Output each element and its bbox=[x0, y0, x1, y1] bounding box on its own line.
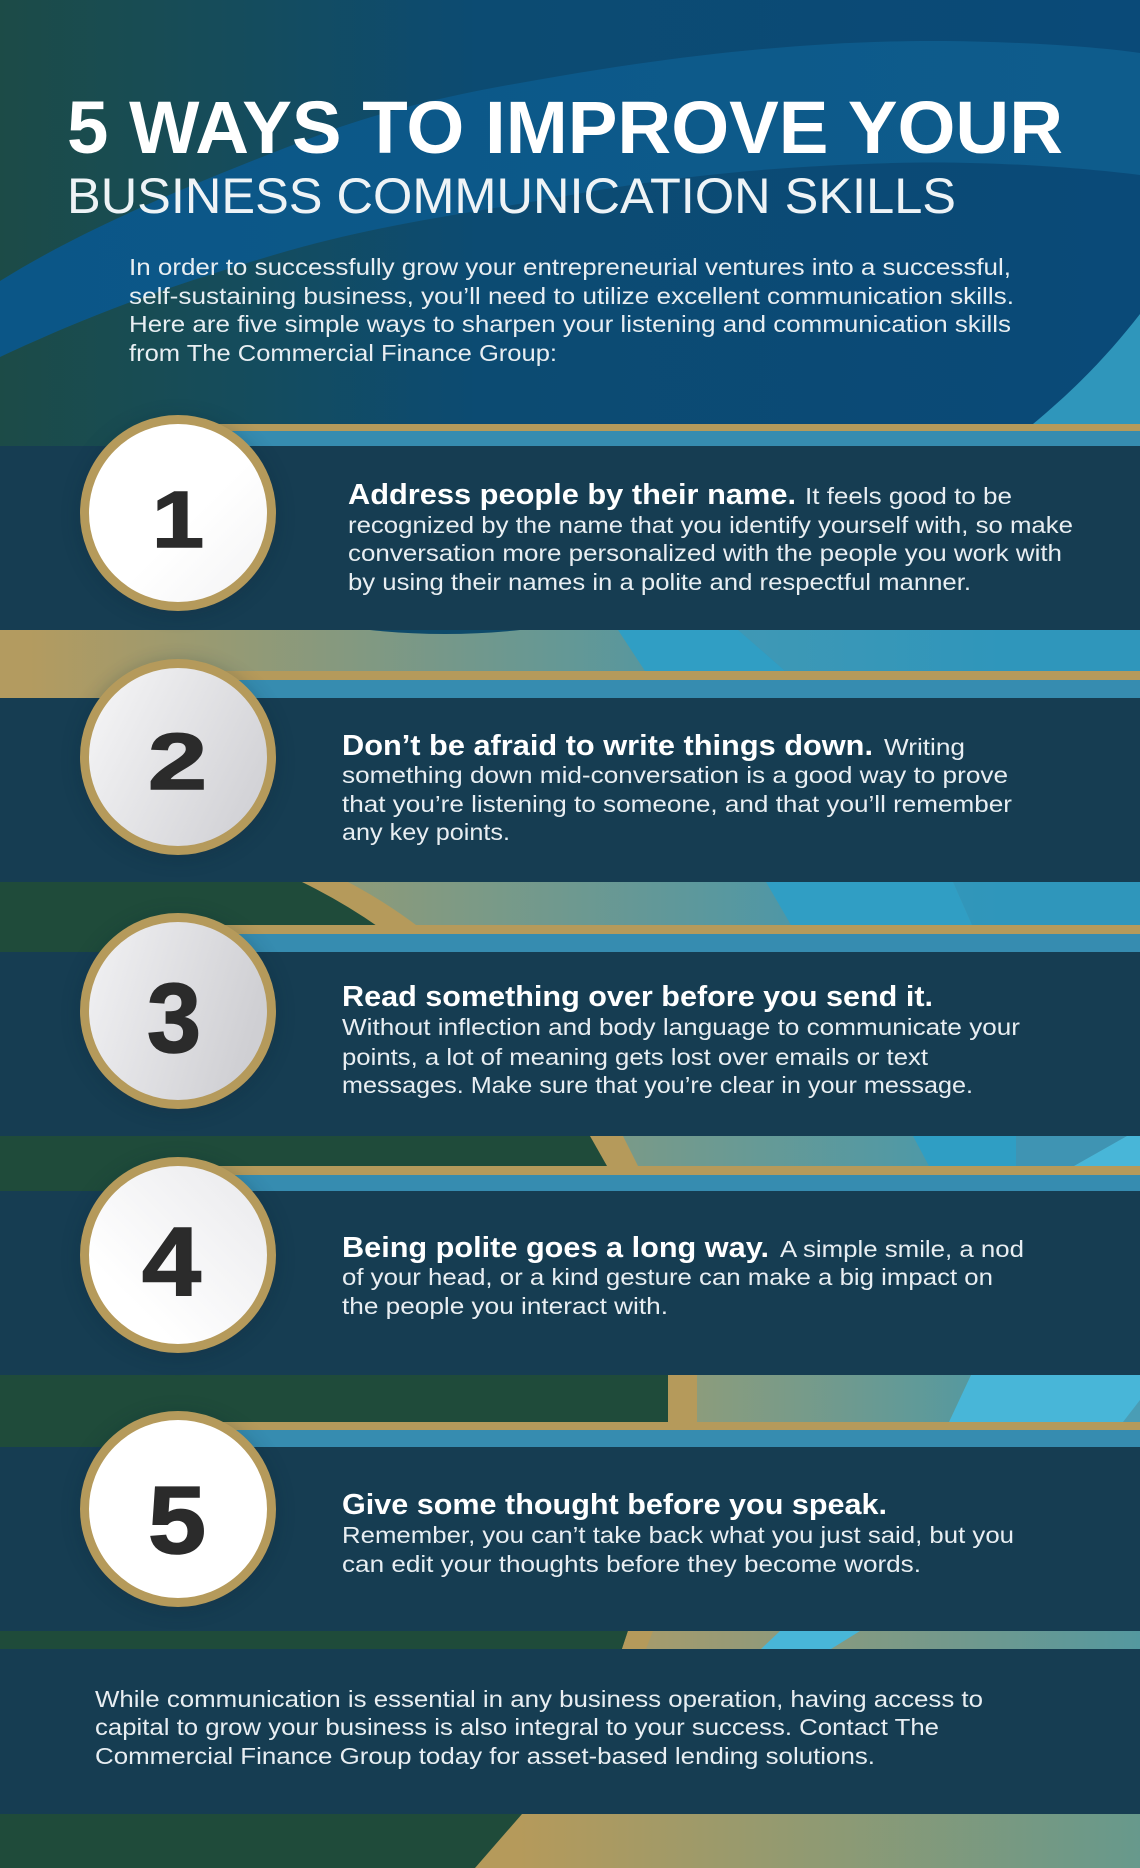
panel 5 text: Remember, you can’t take back what you just said, but you bbox=[342, 1522, 1014, 1548]
panel 3 text bbox=[342, 981, 1020, 1098]
panel 5: think before speaking bbox=[0, 1412, 1140, 1631]
closing paragraph: capital to grow your business is also integral to your success. Contact The bbox=[95, 1714, 939, 1740]
number badge 5 bbox=[84, 1416, 272, 1602]
number badge 3 bbox=[84, 918, 272, 1104]
number badge 4: 4 bbox=[142, 1207, 201, 1316]
panel 1 text: Address people by their name. bbox=[348, 479, 796, 511]
panel 2 text: Writing bbox=[884, 734, 965, 760]
intro paragraph: from The Commercial Finance Group: bbox=[129, 340, 557, 366]
panel 2 text bbox=[342, 730, 1012, 845]
panel 2 text: something down mid-conversation is a good way to prove bbox=[342, 762, 1008, 788]
closing paragraph: While communication is essential in any business operation, having access to bbox=[95, 1686, 983, 1712]
panel 4 text: A simple smile, a nod bbox=[780, 1236, 1024, 1262]
decorative band between panel 5 and closing panel bbox=[0, 1631, 1140, 1649]
number badge 5: 5 bbox=[148, 1467, 206, 1574]
panel 1 text: by using their names in a polite and respectful manner. bbox=[348, 569, 971, 595]
panel 5 text: Give some thought before you speak. bbox=[342, 1489, 887, 1521]
panel 3 text: Without inflection and body language to communicate your bbox=[342, 1014, 1020, 1040]
intro paragraph: In order to successfully grow your entrepreneurial ventures into a successful, bbox=[129, 254, 1011, 280]
panel 4 text bbox=[342, 1232, 1024, 1319]
panel 3 text: Read something over before you send it. bbox=[342, 981, 933, 1013]
panel 3: read before sending bbox=[0, 914, 1140, 1136]
panel 5 text bbox=[342, 1489, 1014, 1577]
decorative band between panels 4 and 5 bbox=[0, 1375, 1140, 1447]
panel 1 text: It feels good to be bbox=[805, 483, 1012, 509]
intro paragraph: Here are five simple ways to sharpen your listening and communication skills bbox=[129, 311, 1011, 337]
header title: 5 WAYS TO IMPROVE YOUR bbox=[67, 86, 1063, 169]
panel 4 text: the people you interact with. bbox=[342, 1293, 668, 1319]
panel 2: write things down bbox=[0, 660, 1140, 882]
number badge 2: 2 bbox=[148, 717, 207, 806]
header subtitle: BUSINESS COMMUNICATION SKILLS bbox=[67, 168, 956, 224]
panel 4 text: of your head, or a kind gesture can make a big impact on bbox=[342, 1264, 993, 1290]
panel 4: being polite bbox=[0, 1158, 1140, 1375]
number badge 3: 3 bbox=[147, 963, 201, 1073]
panel 1 text bbox=[348, 479, 1073, 595]
panel 4 text: Being polite goes a long way. bbox=[342, 1232, 769, 1264]
intro paragraph: self-sustaining business, you’ll need to utilize excellent communication skills. bbox=[129, 283, 1014, 309]
panel 3 text: messages. Make sure that you’re clear in your message. bbox=[342, 1072, 973, 1098]
decorative band between panels 2 and 3 bbox=[0, 882, 1140, 952]
number badge 2 bbox=[84, 664, 272, 850]
decorative band between panels 3 and 4 bbox=[0, 1136, 1140, 1191]
intro paragraph bbox=[129, 254, 1014, 366]
decorative band between panels 1 and 2 bbox=[0, 630, 1140, 698]
panel 2 text: Don’t be afraid to write things down. bbox=[342, 730, 873, 762]
closing paragraph: Commercial Finance Group today for asset-based lending solutions. bbox=[95, 1743, 875, 1769]
number badge 1: 1 bbox=[152, 475, 204, 564]
closing paragraph bbox=[95, 1686, 983, 1769]
panel 1 text: conversation more personalized with the people you work with bbox=[348, 540, 1062, 566]
panel 1: address people by name bbox=[0, 416, 1140, 630]
decorative footer band bbox=[0, 1814, 1140, 1868]
panel 2 text: any key points. bbox=[342, 819, 510, 845]
header background with waves bbox=[0, 0, 1140, 450]
panel 1 text: recognized by the name that you identify yourself with, so make bbox=[348, 512, 1073, 538]
panel 2 text: that you’re listening to someone, and that you’ll remember bbox=[342, 791, 1012, 817]
panel 5 text: can edit your thoughts before they become words. bbox=[342, 1551, 921, 1577]
panel 3 text: points, a lot of meaning gets lost over emails or text bbox=[342, 1044, 929, 1070]
number badge 1 bbox=[84, 420, 272, 606]
closing panel bbox=[0, 1649, 1140, 1814]
number badge 4 bbox=[84, 1162, 272, 1348]
